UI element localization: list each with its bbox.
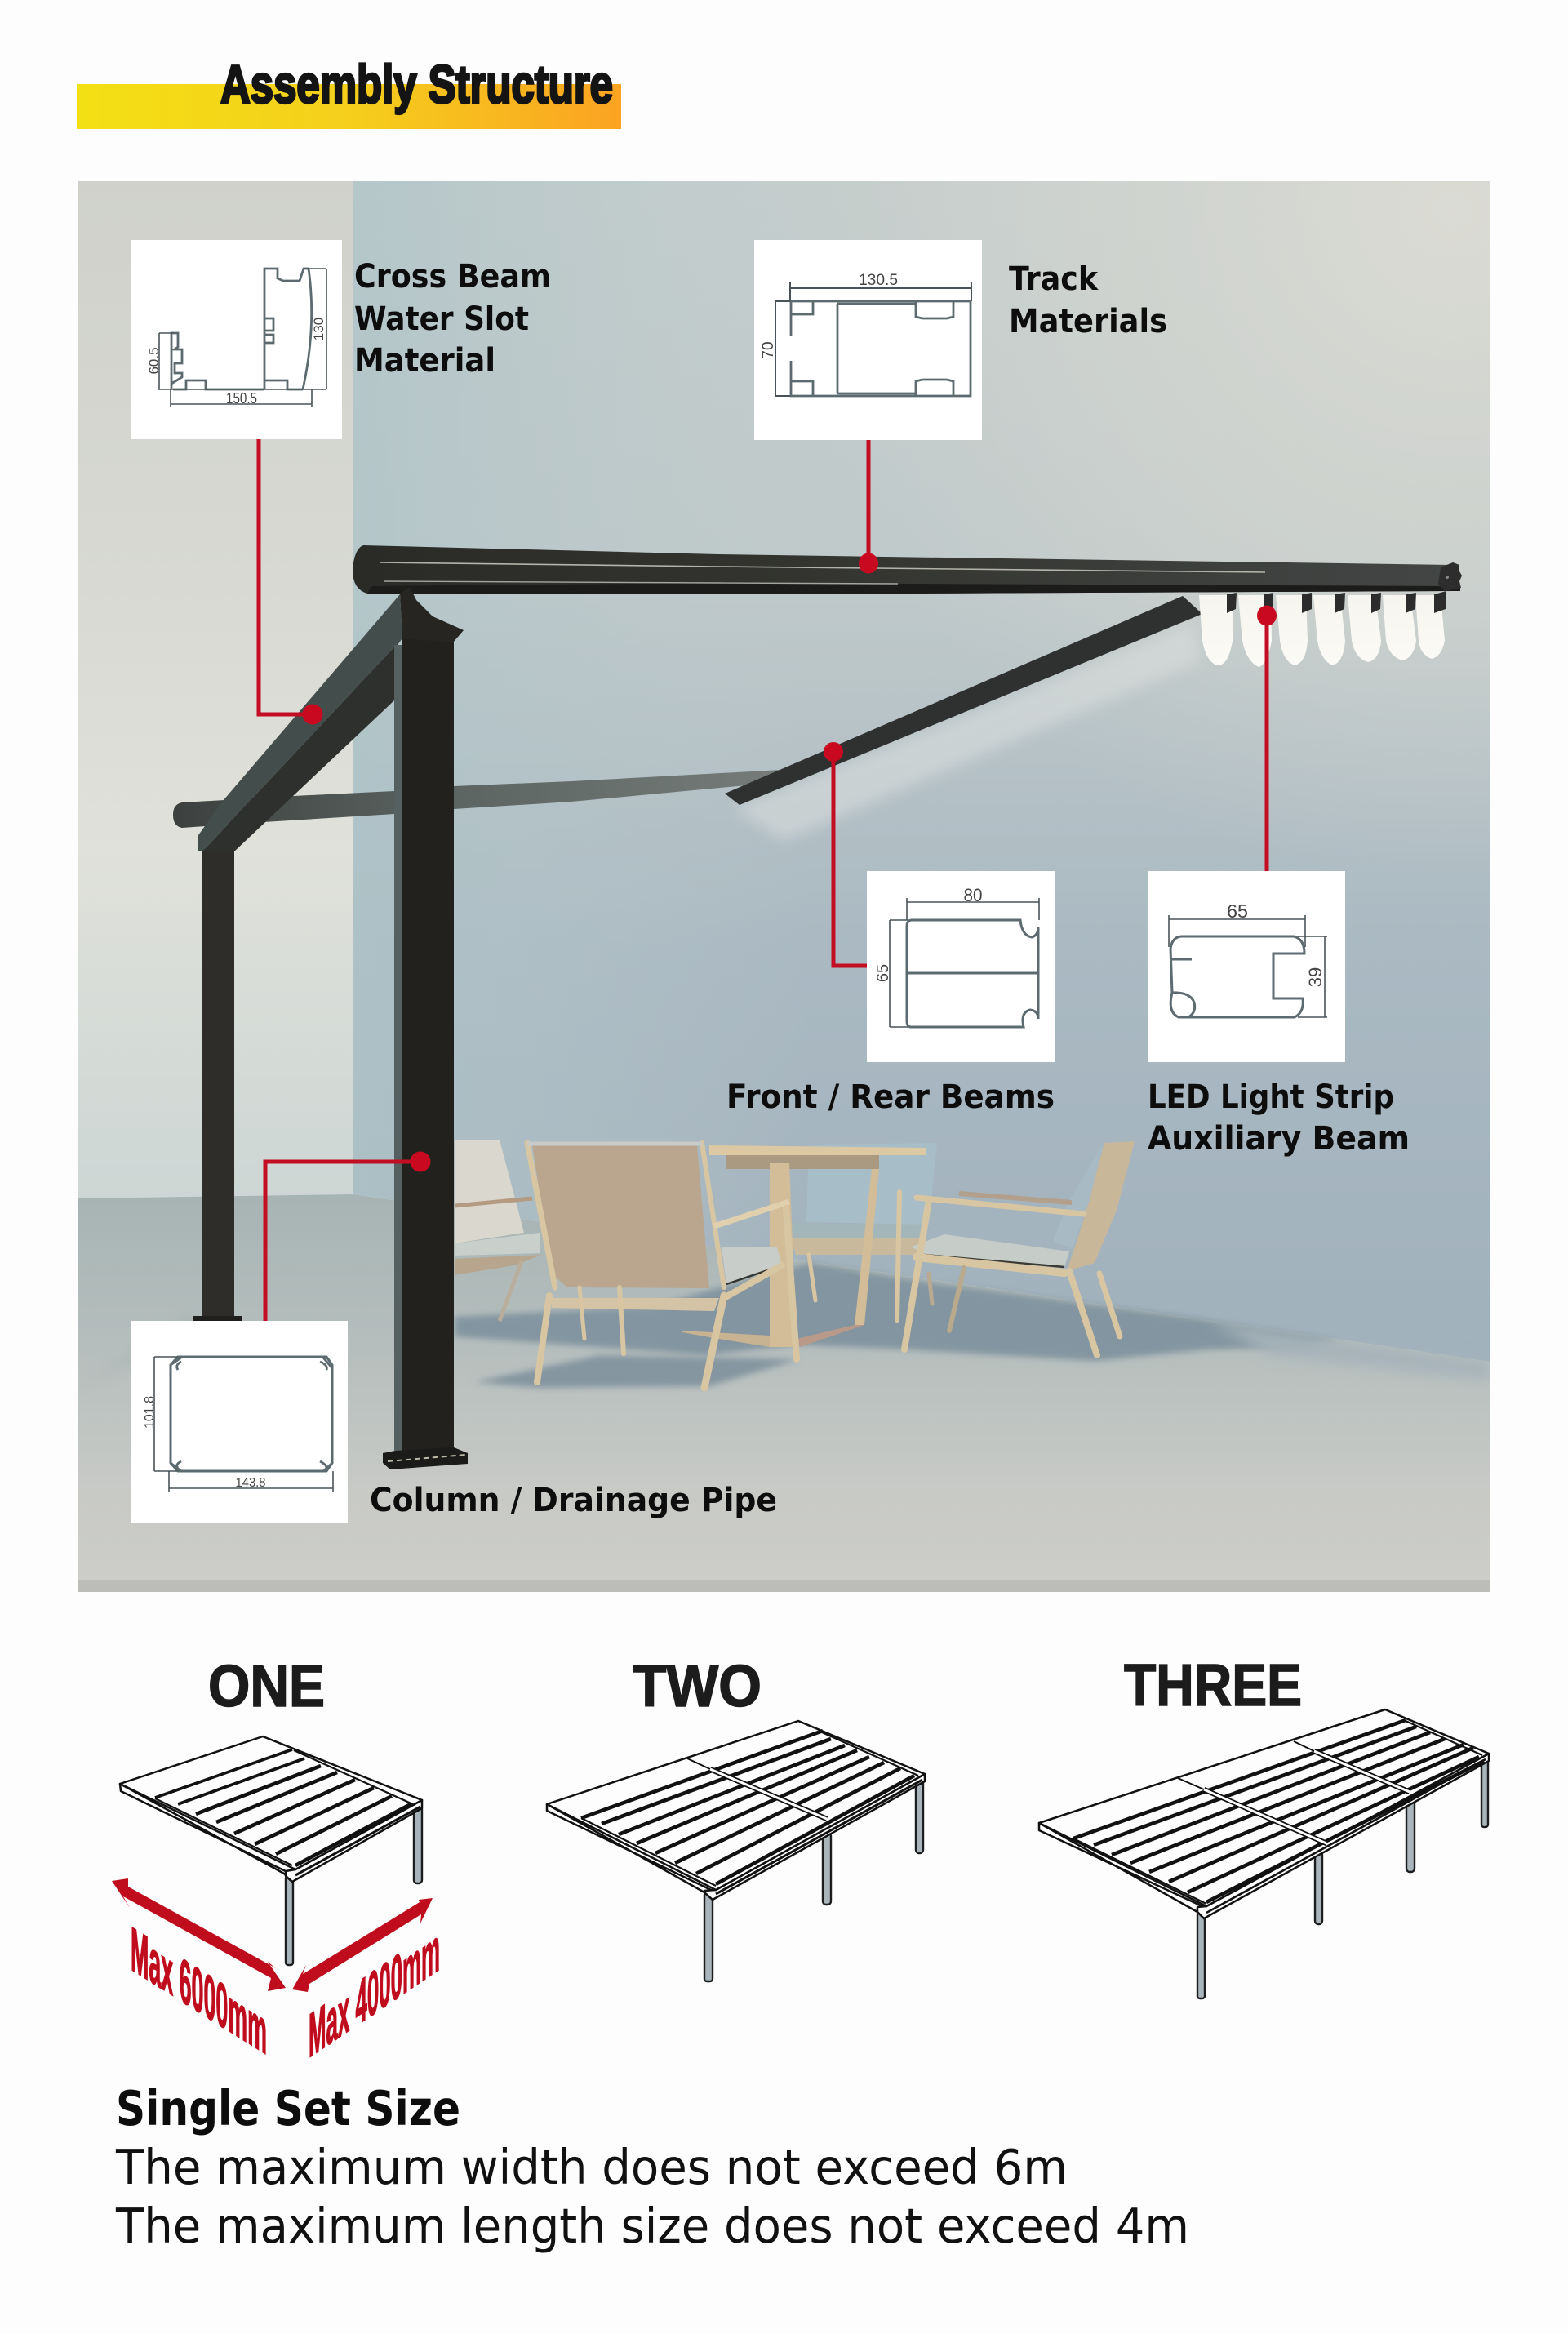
card: column drainage pipe profile: 143.8 [235, 1476, 266, 1490]
callout line: cross beam [259, 439, 323, 725]
furniture: table [682, 1145, 926, 1347]
card: front and rear beam profile [867, 871, 1055, 1062]
text block: single set size: The maximum length size does not exceed 4m [115, 2198, 1189, 2254]
label: LED light strip auxiliary beam: Auxiliary Beam [1148, 1120, 1410, 1158]
label: track materials: Materials [1009, 303, 1167, 340]
furniture: near chair [527, 1143, 797, 1388]
label: front and rear beams: Front / Rear Beams [726, 1078, 1055, 1116]
label: cross beam water slot material: Material [354, 342, 495, 380]
card: track profile: 130.5 [859, 272, 898, 289]
scene backdrop: walls and floor [78, 181, 1490, 1592]
label: column drainage pipe: Column / Drainage Pipe [370, 1482, 777, 1519]
rafter [198, 594, 402, 851]
text block: single set size [115, 2080, 1189, 2254]
diagonal front beam [725, 596, 1202, 805]
card: cross beam profile: 150.5 [226, 390, 257, 407]
label: cross beam water slot material: Cross Beam [354, 258, 551, 296]
track beam [353, 545, 1462, 594]
callout line: front and rear beams [824, 742, 867, 966]
heading: ONE: ONE [208, 1654, 325, 1719]
card: LED auxiliary beam profile: 65 [1227, 900, 1248, 922]
card: cross beam profile: 60.5 [146, 347, 162, 375]
callout line: column [265, 1151, 431, 1321]
title text: Assembly Structure [220, 54, 613, 114]
label: cross beam water slot material: Water Slot [354, 300, 529, 338]
text block: single set size: Single Set Size [116, 2080, 460, 2136]
furniture: left white chair [455, 1140, 542, 1321]
callout line: LED strip [1257, 606, 1277, 871]
card: LED auxiliary beam profile [1148, 871, 1345, 1062]
title banner [77, 54, 621, 129]
cross beam behind columns [173, 770, 781, 828]
label: track materials: Track [1009, 260, 1099, 298]
floor shadows [78, 1263, 1490, 1388]
card: column drainage pipe profile [131, 1321, 348, 1523]
label: cross beam water slot material [355, 263, 549, 372]
card: cross beam profile: 130 [311, 318, 326, 340]
diagram: two set pergola [547, 1721, 925, 1981]
card: column drainage pipe profile: 101.8 [143, 1396, 157, 1429]
card: track profile [754, 240, 982, 440]
LED light strip fingers [1199, 591, 1446, 667]
label: track materials [1009, 265, 1166, 333]
label: LED light strip auxiliary beam [1148, 1078, 1410, 1158]
card: front and rear beam profile: 65 [874, 964, 892, 982]
dimension arrow: max 4000mm [292, 1898, 440, 2071]
card: front and rear beam profile: 80 [963, 885, 983, 905]
card: LED auxiliary beam profile: 39 [1305, 967, 1326, 987]
callout line: track [859, 440, 878, 573]
text: Max 6000mm [131, 1913, 267, 2068]
rear column [193, 849, 242, 1323]
title bar gradient [77, 84, 621, 129]
diagram: three set pergola [1039, 1709, 1489, 1998]
card: cross beam profile [131, 240, 342, 439]
front column [383, 587, 468, 1469]
panel: assembly photo scene [78, 181, 1490, 1592]
card: track profile: 70 [760, 341, 777, 359]
heading: TWO: TWO [633, 1654, 762, 1719]
dimension arrow: max 6000mm [112, 1878, 286, 2068]
text block: single set size: The maximum width does not exceed 6m [115, 2139, 1068, 2195]
diagram: one set pergola [120, 1736, 422, 1965]
furniture: right chair [904, 1141, 1135, 1355]
label: LED light strip auxiliary beam: LED Light Strip [1148, 1078, 1394, 1116]
text: Max 4000mm [309, 1913, 440, 2071]
heading: THREE: THREE [1124, 1653, 1302, 1718]
furniture: back blue chair [789, 1143, 937, 1320]
